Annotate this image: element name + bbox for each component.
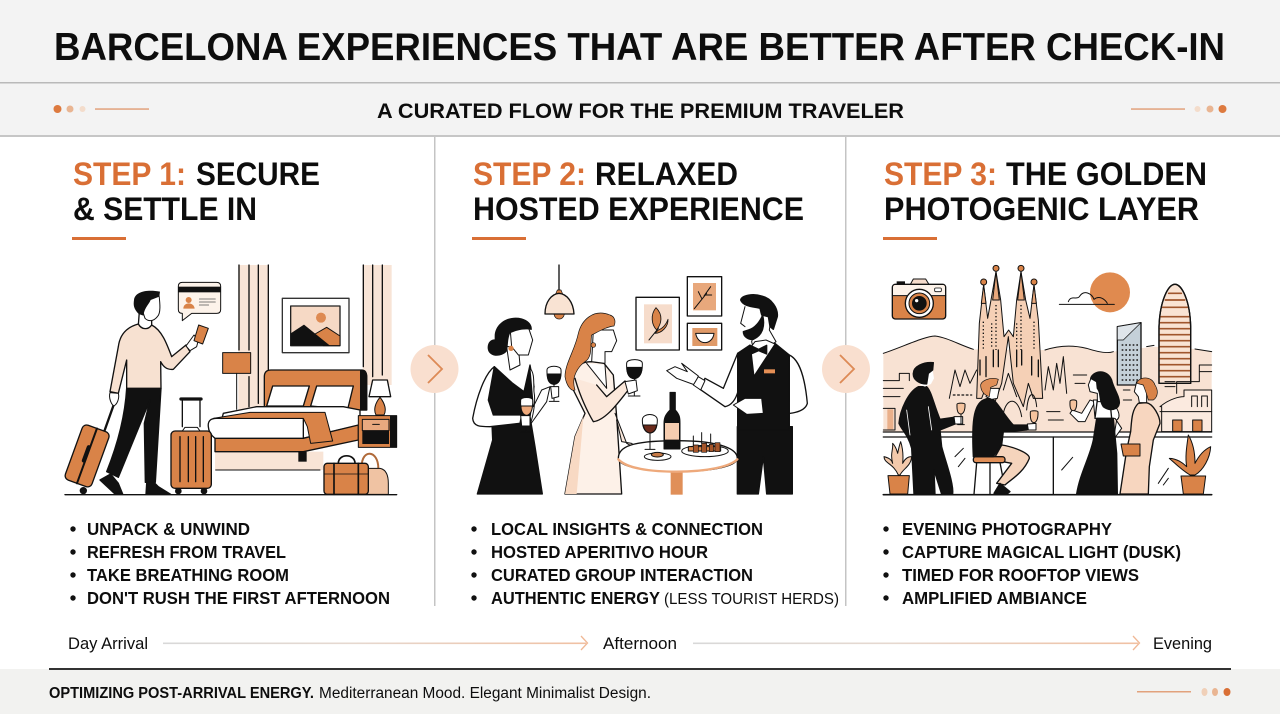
curtains [238, 265, 392, 412]
upright suitcase [171, 399, 211, 494]
step 1 checklist [70, 519, 390, 608]
step 2 checklist: HOSTED APERITIVO HOUR [491, 542, 708, 562]
woman in peach dress [1120, 378, 1160, 494]
woman in peach dress [565, 313, 642, 494]
step 1 checklist: UNPACK & UNWIND [87, 519, 250, 539]
step 2 heading: STEP 2: [473, 156, 586, 192]
right side buildings [1160, 365, 1212, 432]
arrow: step 2 to step 3 [822, 345, 870, 393]
timeline: Evening [1153, 634, 1212, 653]
subtitle: A CURATED FLOW FOR THE PREMIUM TRAVELER [377, 99, 904, 123]
step 1 checklist: DON'T RUSH THE FIRST AFTERNOON [87, 588, 390, 608]
footer text [49, 685, 651, 702]
step 3 checklist: TIMED FOR ROOFTOP VIEWS [902, 565, 1139, 585]
balcony railing [883, 432, 1212, 495]
Sagrada Familia [977, 265, 1043, 417]
step 2 checklist [471, 519, 839, 608]
step 3 heading: STEP 3: [884, 156, 997, 192]
step 2 heading: RELAXED [595, 156, 738, 192]
seated man on stool [973, 378, 1038, 494]
footer text: Mediterranean Mood. Elegant Minimalist Design. [319, 685, 651, 702]
skyscraper tower [1159, 284, 1191, 383]
ornament: header right [1131, 105, 1226, 113]
step 1 heading: SECURE [196, 156, 320, 192]
glass office building [1117, 323, 1141, 385]
bed [208, 370, 367, 470]
step 2 checklist: (LESS TOURIST HERDS) [664, 591, 839, 608]
step 2 heading: HOSTED EXPERIENCE [473, 191, 804, 227]
step 3 heading: THE GOLDEN [1006, 156, 1207, 192]
step 1 heading [72, 156, 320, 240]
ID card speech bubble [178, 282, 221, 321]
step 2 checklist: AUTHENTIC ENERGY [491, 588, 660, 608]
step 3 heading [883, 156, 1207, 240]
footer text: OPTIMIZING POST-ARRIVAL ENERGY. [49, 685, 314, 702]
step 3 checklist: CAPTURE MAGICAL LIGHT (DUSK) [902, 542, 1181, 562]
camera [892, 279, 946, 319]
timeline: Afternoon [603, 634, 677, 653]
nightstand and lamp [358, 380, 397, 447]
ornament: header left [54, 105, 149, 113]
floor line [65, 493, 397, 497]
sun and cloud [1059, 272, 1130, 312]
illustration: hotel room arrival [64, 265, 397, 495]
step 1 checklist: REFRESH FROM TRAVEL [87, 542, 286, 562]
waiter [667, 295, 807, 494]
wall light [223, 353, 251, 409]
step 2 checklist: LOCAL INSIGHTS & CONNECTION [491, 519, 763, 539]
step 3 checklist: AMPLIFIED AMBIANCE [902, 588, 1087, 608]
timeline: Day Arrival [68, 634, 148, 653]
header band [0, 0, 1280, 137]
step 3 checklist: EVENING PHOTOGRAPHY [902, 519, 1112, 539]
framed picture [282, 298, 349, 353]
timeline [68, 634, 1212, 653]
pendant lamp [545, 265, 574, 319]
man standing in suit [899, 363, 965, 494]
step 1 heading: STEP 1: [73, 156, 186, 192]
illustration: hosted aperitivo [473, 265, 807, 495]
step 2 checklist: CURATED GROUP INTERACTION [491, 565, 753, 585]
arrow: step 1 to step 2 [410, 345, 458, 393]
woman in black dress [473, 318, 561, 494]
ornament: footer right [1137, 688, 1230, 696]
step 1 heading: & SETTLE IN [73, 191, 257, 227]
left plant [884, 442, 912, 494]
left suitcase [64, 404, 114, 494]
step 1 checklist: TAKE BREATHING ROOM [87, 565, 289, 585]
column dividers [434, 137, 846, 606]
footer band [0, 668, 1280, 714]
travel bags [324, 454, 388, 494]
right plant [1169, 435, 1211, 494]
step 3 heading: PHOTOGENIC LAYER [884, 191, 1199, 227]
step 3 checklist [883, 519, 1181, 608]
traveler [100, 291, 208, 494]
title: BARCELONA EXPERIENCES THAT ARE BETTER AFTER CHECK-IN [54, 26, 1225, 69]
woman in black gown [1070, 372, 1122, 494]
illustration: rooftop at golden hour [883, 265, 1212, 495]
city skyline background [883, 336, 1212, 432]
step 2 heading [472, 156, 804, 240]
table with wine and snacks [618, 392, 737, 495]
wall art [636, 277, 722, 350]
